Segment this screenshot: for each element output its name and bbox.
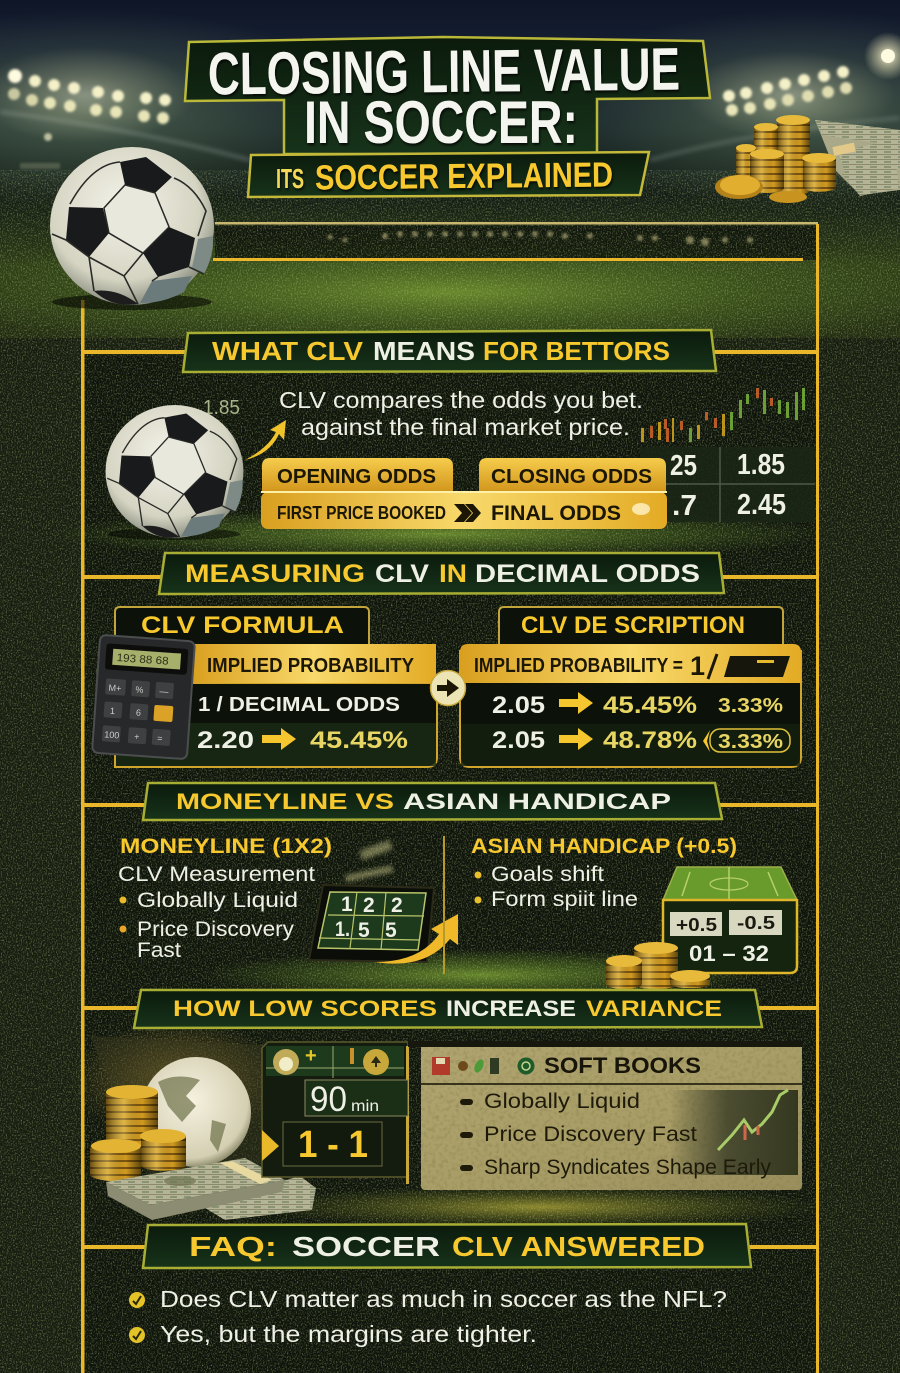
icon: calculator: — [159, 686, 169, 697]
panel: FAQ [129, 1286, 727, 1347]
pitch scoreboard: -0.5 [737, 913, 775, 933]
odds tablet: 1 [341, 893, 353, 916]
blurred stands strip [20, 163, 753, 246]
dark stadium backdrop [90, 1036, 262, 1180]
section heading: measuring CLV: MEASURING [185, 560, 365, 588]
moneyline list: Globally Liquid [137, 889, 298, 912]
section heading: FAQ [143, 1224, 751, 1268]
icon: calculator: M+ [108, 683, 122, 693]
header icons [432, 1057, 534, 1075]
formula card: 45.45% [310, 727, 408, 754]
row: second odds [492, 727, 790, 754]
section heading: FAQ: SOCCER [292, 1231, 440, 1262]
description text: against the final market price. [301, 414, 630, 440]
row: second odds: 2.05 [492, 727, 545, 754]
icon: calculator: 1 [110, 706, 115, 716]
blurred stand glow [345, 840, 393, 882]
row: second odds: 3.33% [718, 731, 783, 753]
odds tablet: 2 [391, 894, 403, 917]
callout: opening and closing odds: FINAL ODDS [491, 502, 621, 525]
asian handicap list [474, 863, 638, 911]
panel: CLV formula [92, 607, 437, 767]
soft books list [460, 1090, 771, 1179]
odds tablet: 5 [358, 919, 370, 942]
icon: calculator: = [157, 733, 163, 743]
soft books list: Globally Liquid [484, 1090, 640, 1113]
asian handicap heading: ASIAN HANDICAP (+0.5) [471, 835, 737, 858]
left floodlights [0, 47, 195, 143]
pitch scoreboard: 01 – 32 [689, 941, 769, 966]
subtitle banner: ITS [276, 163, 304, 194]
moneyline list: Fast [137, 939, 181, 962]
scoreboard icons [266, 1045, 404, 1078]
section heading: FAQ: FAQ: [189, 1231, 277, 1262]
pitch scoreboard [663, 867, 797, 973]
row: first odds: 2.05 [492, 692, 545, 719]
callout: opening and closing odds: CLOSING ODDS [491, 466, 652, 488]
description text [279, 387, 643, 440]
odds table: 25 [670, 450, 697, 482]
timer: 90 [310, 1080, 347, 1119]
moneyline list [118, 863, 315, 962]
section heading: moneyline vs asian handicap: ASIAN HANDICAP [403, 789, 671, 814]
section heading: low scores variance: HOW LOW SCORES [173, 996, 437, 1021]
section heading: low scores variance [134, 990, 762, 1028]
FAQ question: Does CLV matter as much in soccer as the NFL? [160, 1286, 727, 1312]
section heading: measuring CLV: IN [439, 560, 467, 588]
icon: globe [141, 1057, 251, 1167]
callout: opening and closing odds [261, 458, 667, 529]
section heading: measuring CLV: DECIMAL ODDS [475, 560, 700, 588]
icon: coin stacks [90, 1085, 186, 1181]
section heading: what CLV means: FOR BETTORS [483, 336, 670, 366]
soccer ball [106, 405, 243, 540]
odds table: .7 [672, 490, 697, 522]
subtitle banner: SOCCER EXPLAINED [315, 155, 613, 198]
row: first odds: 3.33% [718, 695, 783, 717]
timer: min [351, 1098, 379, 1115]
odds tablet: 5 [385, 919, 397, 942]
odds number behind ball: 1.85 [203, 397, 240, 419]
panel: asian handicap [471, 835, 797, 989]
panel: what CLV means [106, 387, 815, 540]
title text [208, 35, 680, 156]
description card: IMPLIED PROBABILITY = [474, 655, 683, 677]
title text: IN SOCCER: [304, 89, 578, 156]
row: first odds: 45.45% [603, 692, 697, 719]
soccer ball: top left [50, 147, 214, 310]
icon: calculator: 6 [136, 708, 141, 718]
icon: calculator: 193 88 68 [116, 652, 169, 668]
icon: coin stacks [606, 942, 710, 989]
tab: CLV description: CLV DE SCRIPTION [521, 612, 745, 639]
section heading: what CLV means: WHAT CLV [212, 336, 364, 366]
icon: circle arrow between cards [430, 670, 466, 706]
illustration: globe, coins and cash [90, 1036, 316, 1220]
tab: CLV description [499, 607, 783, 645]
icon: coin stacks [715, 115, 836, 203]
section heading: low scores variance: VARIANCE [586, 996, 722, 1021]
asian handicap list: Goals shift [491, 863, 604, 886]
moneyline list: Price Discovery [137, 918, 295, 941]
asian handicap list: Form spiit line [491, 888, 638, 911]
odds tablet [309, 885, 434, 962]
soft books list: Sharp Syndicates Shape Early [484, 1156, 771, 1179]
divider between columns [443, 836, 445, 974]
panel: moneyline [118, 835, 458, 964]
title banner [185, 35, 710, 156]
panel: CLV description [460, 607, 801, 767]
section heading: moneyline vs asian handicap: MONEYLINE VS [176, 789, 394, 814]
formula card: 2.20 [197, 727, 254, 754]
icon: cash bundles [106, 1158, 316, 1220]
odds table [640, 447, 815, 522]
section heading: moneyline vs asian handicap [143, 783, 722, 820]
callout: opening and closing odds: OPENING ODDS [277, 466, 436, 488]
section heading: measuring CLV: CLV [375, 560, 429, 588]
odds table: 1.85 [737, 449, 785, 481]
right floodlights [685, 32, 900, 139]
scoreboard: 90 min and 1-1 [262, 1042, 409, 1184]
tab: CLV formula: CLV FORMULA [141, 612, 344, 639]
description card: 1 [690, 651, 705, 681]
moneyline heading: MONEYLINE (1X2) [120, 835, 332, 858]
section heading: what CLV means: MEANS [373, 336, 475, 366]
frame: gold lines [81, 222, 819, 1373]
soft books list: Price Discovery Fast [484, 1123, 697, 1146]
row: second odds: 48.78% [603, 727, 697, 754]
odds tablet: 1. [335, 918, 350, 941]
icon: calculator [92, 635, 195, 759]
callout: opening and closing odds: FIRST PRICE BOOKED [277, 503, 446, 523]
soft books heading: SOFT BOOKS [544, 1053, 701, 1078]
money and coins top right [715, 115, 900, 203]
icon: cash stacks [815, 120, 900, 196]
formula card [115, 644, 437, 767]
odds table: 2.45 [737, 489, 786, 521]
description text: CLV compares the odds you bet. [279, 387, 643, 413]
formula card: IMPLIED PROBABILITY [207, 655, 415, 677]
icon: double chevron [454, 504, 481, 522]
arrow up to text [245, 420, 286, 460]
formula card: 1 / DECIMAL ODDS [198, 694, 400, 716]
score: 1 - 1 [298, 1124, 368, 1166]
moneyline list: CLV Measurement [118, 863, 315, 886]
section heading: measuring CLV [159, 553, 724, 594]
curved arrow [375, 914, 458, 964]
section heading: FAQ: CLV ANSWERED [452, 1231, 705, 1262]
pitch scoreboard: +0.5 [676, 915, 717, 935]
row: first odds [492, 692, 783, 719]
section heading: what CLV means [183, 330, 716, 372]
odds tablet: 2 [363, 894, 375, 917]
icon: calculator: + [134, 731, 140, 742]
tab: CLV formula [115, 607, 369, 645]
panel: soft books [408, 1041, 802, 1190]
title text: CLOSING LINE VALUE [208, 35, 680, 107]
FAQ answer: Yes, but the margins are tighter. [160, 1321, 537, 1347]
icon: calculator: % [135, 684, 144, 695]
mini chart [670, 1090, 798, 1175]
icon: calculator: 100 [104, 729, 120, 740]
score [262, 1122, 382, 1166]
section heading: low scores variance: INCREASE [446, 996, 576, 1021]
timer [305, 1080, 408, 1119]
candlestick chart [641, 388, 805, 442]
scoreboard icons: + [305, 1045, 317, 1067]
description card [460, 644, 801, 767]
